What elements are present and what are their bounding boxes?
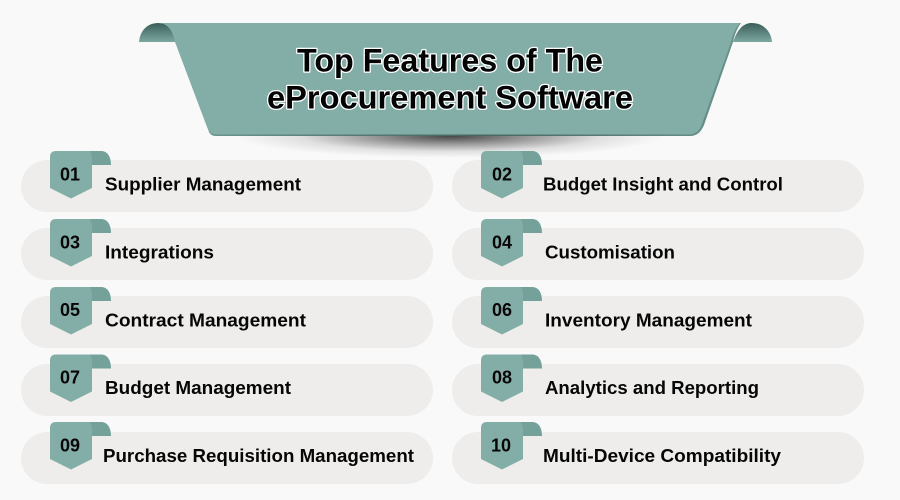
item 08: 08 bbox=[492, 368, 512, 388]
item 04: Customisation bbox=[545, 242, 675, 262]
banner ribbon edge bbox=[208, 23, 741, 136]
item 10 bbox=[452, 422, 864, 484]
right banner ear bbox=[733, 23, 772, 42]
item 09: 09 bbox=[60, 436, 80, 456]
item 03: 03 bbox=[60, 232, 80, 252]
item 07: 07 bbox=[60, 368, 80, 388]
item 10: 10 bbox=[491, 436, 511, 456]
item 02: Budget Insight and Control bbox=[543, 174, 783, 194]
item 06 bbox=[452, 287, 864, 348]
banner: eProcurement Software bbox=[267, 80, 633, 116]
item 10: Multi-Device Compatibility bbox=[543, 446, 781, 466]
item 06: Inventory Management bbox=[545, 310, 752, 330]
title: Top Features of The bbox=[297, 42, 603, 78]
item 08 bbox=[452, 354, 864, 416]
item 03 bbox=[21, 219, 433, 280]
item 05 bbox=[21, 287, 433, 348]
item 02 bbox=[452, 151, 864, 212]
left banner ear bbox=[139, 23, 176, 42]
item 01 bbox=[21, 151, 433, 212]
banner ribbon bbox=[158, 23, 740, 134]
item 01: 01 bbox=[60, 164, 80, 184]
item 06: 06 bbox=[492, 300, 512, 320]
item 03: Integrations bbox=[105, 242, 214, 262]
item 01: Supplier Management bbox=[105, 174, 301, 194]
item 07 bbox=[21, 354, 433, 416]
item 02: 02 bbox=[492, 164, 512, 184]
item 05: 05 bbox=[60, 300, 80, 320]
item 08: Analytics and Reporting bbox=[545, 378, 759, 398]
item 04 bbox=[452, 219, 864, 280]
banner bbox=[139, 23, 772, 158]
item 09 bbox=[21, 422, 433, 484]
banner shadow bbox=[235, 114, 665, 158]
item 05: Contract Management bbox=[105, 310, 306, 330]
item 09: Purchase Requisition Management bbox=[103, 446, 414, 466]
item 07: Budget Management bbox=[105, 378, 291, 398]
item 04: 04 bbox=[492, 232, 512, 252]
